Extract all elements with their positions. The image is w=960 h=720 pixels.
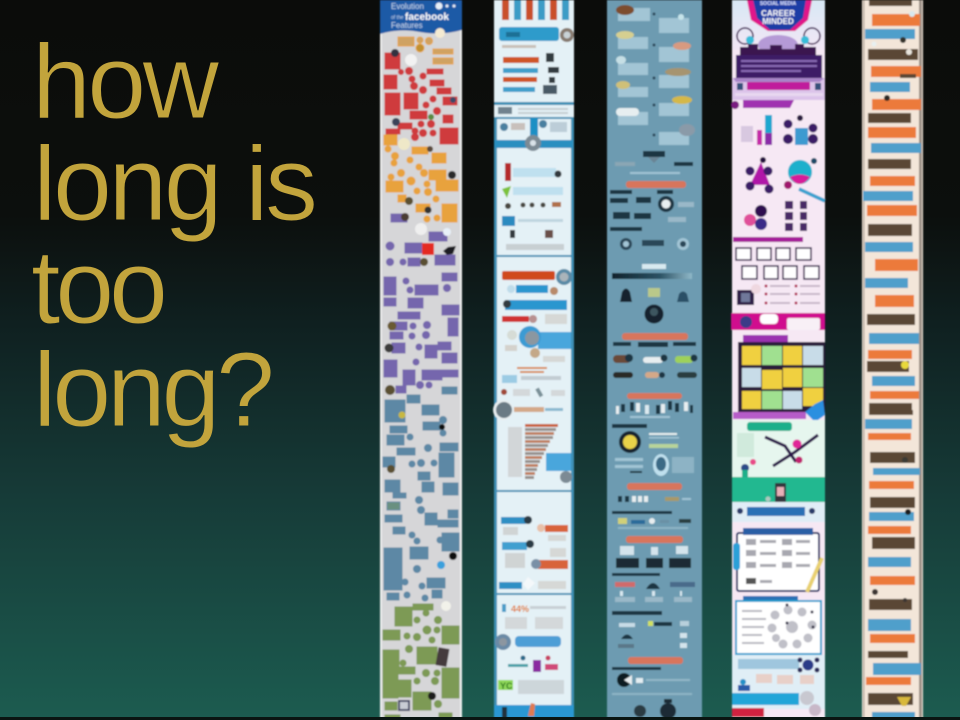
header shield with title: CAREER — [761, 9, 795, 18]
red footer tag — [732, 708, 764, 717]
title: how long is too long?: long? — [33, 331, 275, 449]
red feature cluster — [384, 53, 458, 144]
branching connector with gear — [494, 118, 573, 151]
salmon section heading — [626, 181, 686, 188]
portrait with blue panel — [505, 326, 571, 362]
ranked bar chart — [508, 424, 572, 483]
triangle diagram — [746, 157, 774, 194]
purple bar under grid — [733, 412, 806, 419]
dark photo cards — [398, 647, 449, 711]
blue banner with badge — [499, 27, 574, 42]
white label and gradient bar — [612, 264, 692, 279]
strip 1 header: of the — [391, 15, 404, 21]
venn bubbles — [744, 205, 767, 230]
infographic strip 1: evolution of facebook features — [380, 0, 462, 718]
header shield with title: SOCIAL MEDIA — [760, 1, 797, 7]
orange subheading and text — [501, 367, 565, 397]
bell icons and round badge — [620, 288, 689, 324]
profile rows — [502, 163, 564, 250]
timeline text blocks — [618, 8, 689, 145]
social icons row — [508, 656, 558, 672]
dark sub heading and logos — [612, 511, 691, 529]
small illustrations on bars — [872, 11, 916, 706]
salmon section heading two — [622, 333, 688, 340]
infographic strip 4: social media career minded — [731, 0, 825, 718]
magenta quote band — [731, 313, 825, 330]
title: how long is too long?: too — [31, 228, 168, 346]
strip 1 header: Features — [391, 21, 423, 30]
header shield with title: MINDED — [762, 17, 794, 26]
title: how long is too long? — [31, 23, 318, 449]
white milestone circles and portraits — [384, 28, 457, 611]
alternating blue and orange tips — [499, 516, 568, 590]
title: how long is too long?: long is — [33, 125, 318, 243]
infographic strip 3: steel blue timeline — [607, 0, 702, 719]
section dividers — [494, 102, 574, 718]
people row — [616, 401, 693, 418]
light blue closing section — [732, 655, 825, 709]
pacman chart and figures — [612, 667, 692, 719]
infographic strip 5: orange blue brown timeline — [862, 0, 923, 718]
header shield with title — [747, 0, 812, 31]
orange and blue callouts — [502, 269, 572, 324]
tan and orange feature cluster — [384, 37, 458, 222]
magenta heading bar — [733, 237, 803, 242]
portrait oval — [615, 454, 694, 476]
salmon section heading four — [627, 483, 682, 490]
salmon section heading six — [628, 657, 683, 664]
yellow circle stat — [612, 424, 679, 453]
top vertical bars — [502, 0, 569, 20]
highlighted red block — [422, 243, 434, 255]
blue heart icon — [805, 400, 825, 422]
44 percent stat: 44% — [511, 604, 529, 614]
blue event bars — [863, 29, 921, 718]
platform comparison rows — [612, 611, 689, 648]
brown event bars — [867, 0, 918, 705]
figures and logos row — [618, 496, 691, 502]
portrait badge overlapping edge — [493, 400, 563, 420]
strip 1 header: facebook — [405, 12, 449, 23]
orange event bars — [866, 14, 921, 685]
skyline with dome and mascots — [737, 28, 820, 55]
three dark stat cards — [616, 546, 691, 568]
green feature cluster — [383, 604, 459, 718]
strip 1 header: Evolution — [391, 2, 424, 11]
purple intro text block — [733, 55, 824, 82]
steel blue feature cluster — [383, 387, 459, 601]
purple subheading — [731, 100, 794, 109]
title: how long is too long?: how — [32, 23, 219, 141]
logos row — [615, 151, 693, 174]
44 percent stat — [502, 604, 566, 629]
bar and bubble charts — [741, 115, 818, 145]
three round logos — [620, 238, 689, 250]
blue sub heading — [743, 596, 798, 601]
icon grid — [785, 201, 807, 231]
speech card grid — [736, 248, 819, 279]
text row — [498, 107, 568, 114]
yellow pencil — [807, 558, 822, 592]
purple feature cluster — [384, 214, 459, 393]
comparison pills — [613, 342, 698, 378]
salmon section heading three — [627, 393, 682, 399]
salmon section heading five — [626, 536, 683, 543]
timeline icons — [616, 5, 695, 136]
green yc logo and text: YC — [500, 681, 513, 691]
brand logos row — [612, 573, 695, 602]
black bird icon — [443, 246, 456, 255]
bottom edge of slide — [0, 717, 960, 720]
cyan framed network diagram — [736, 601, 821, 654]
blue footer with figures — [494, 703, 574, 718]
purple sub heading — [743, 335, 788, 342]
infographic strip 2: blue and orange report — [493, 0, 574, 718]
blue pencil swoosh — [799, 189, 825, 201]
framed tile grid — [738, 342, 825, 413]
cyan footer bar with badge — [732, 691, 821, 716]
blue pill with gear — [495, 634, 561, 650]
portrait card and list — [737, 284, 820, 305]
navy framed checklist — [733, 528, 819, 591]
dark label blocks and ring — [610, 190, 694, 231]
green band with phone — [732, 477, 825, 502]
green section with bird and figures — [732, 420, 825, 480]
green yc logo and text — [498, 680, 564, 694]
magenta section banner — [735, 82, 823, 96]
strip 1 header — [380, 0, 462, 34]
horizontal bar chart — [502, 45, 559, 94]
teal and pink ring chart — [784, 158, 817, 189]
blue tips header — [732, 502, 825, 522]
